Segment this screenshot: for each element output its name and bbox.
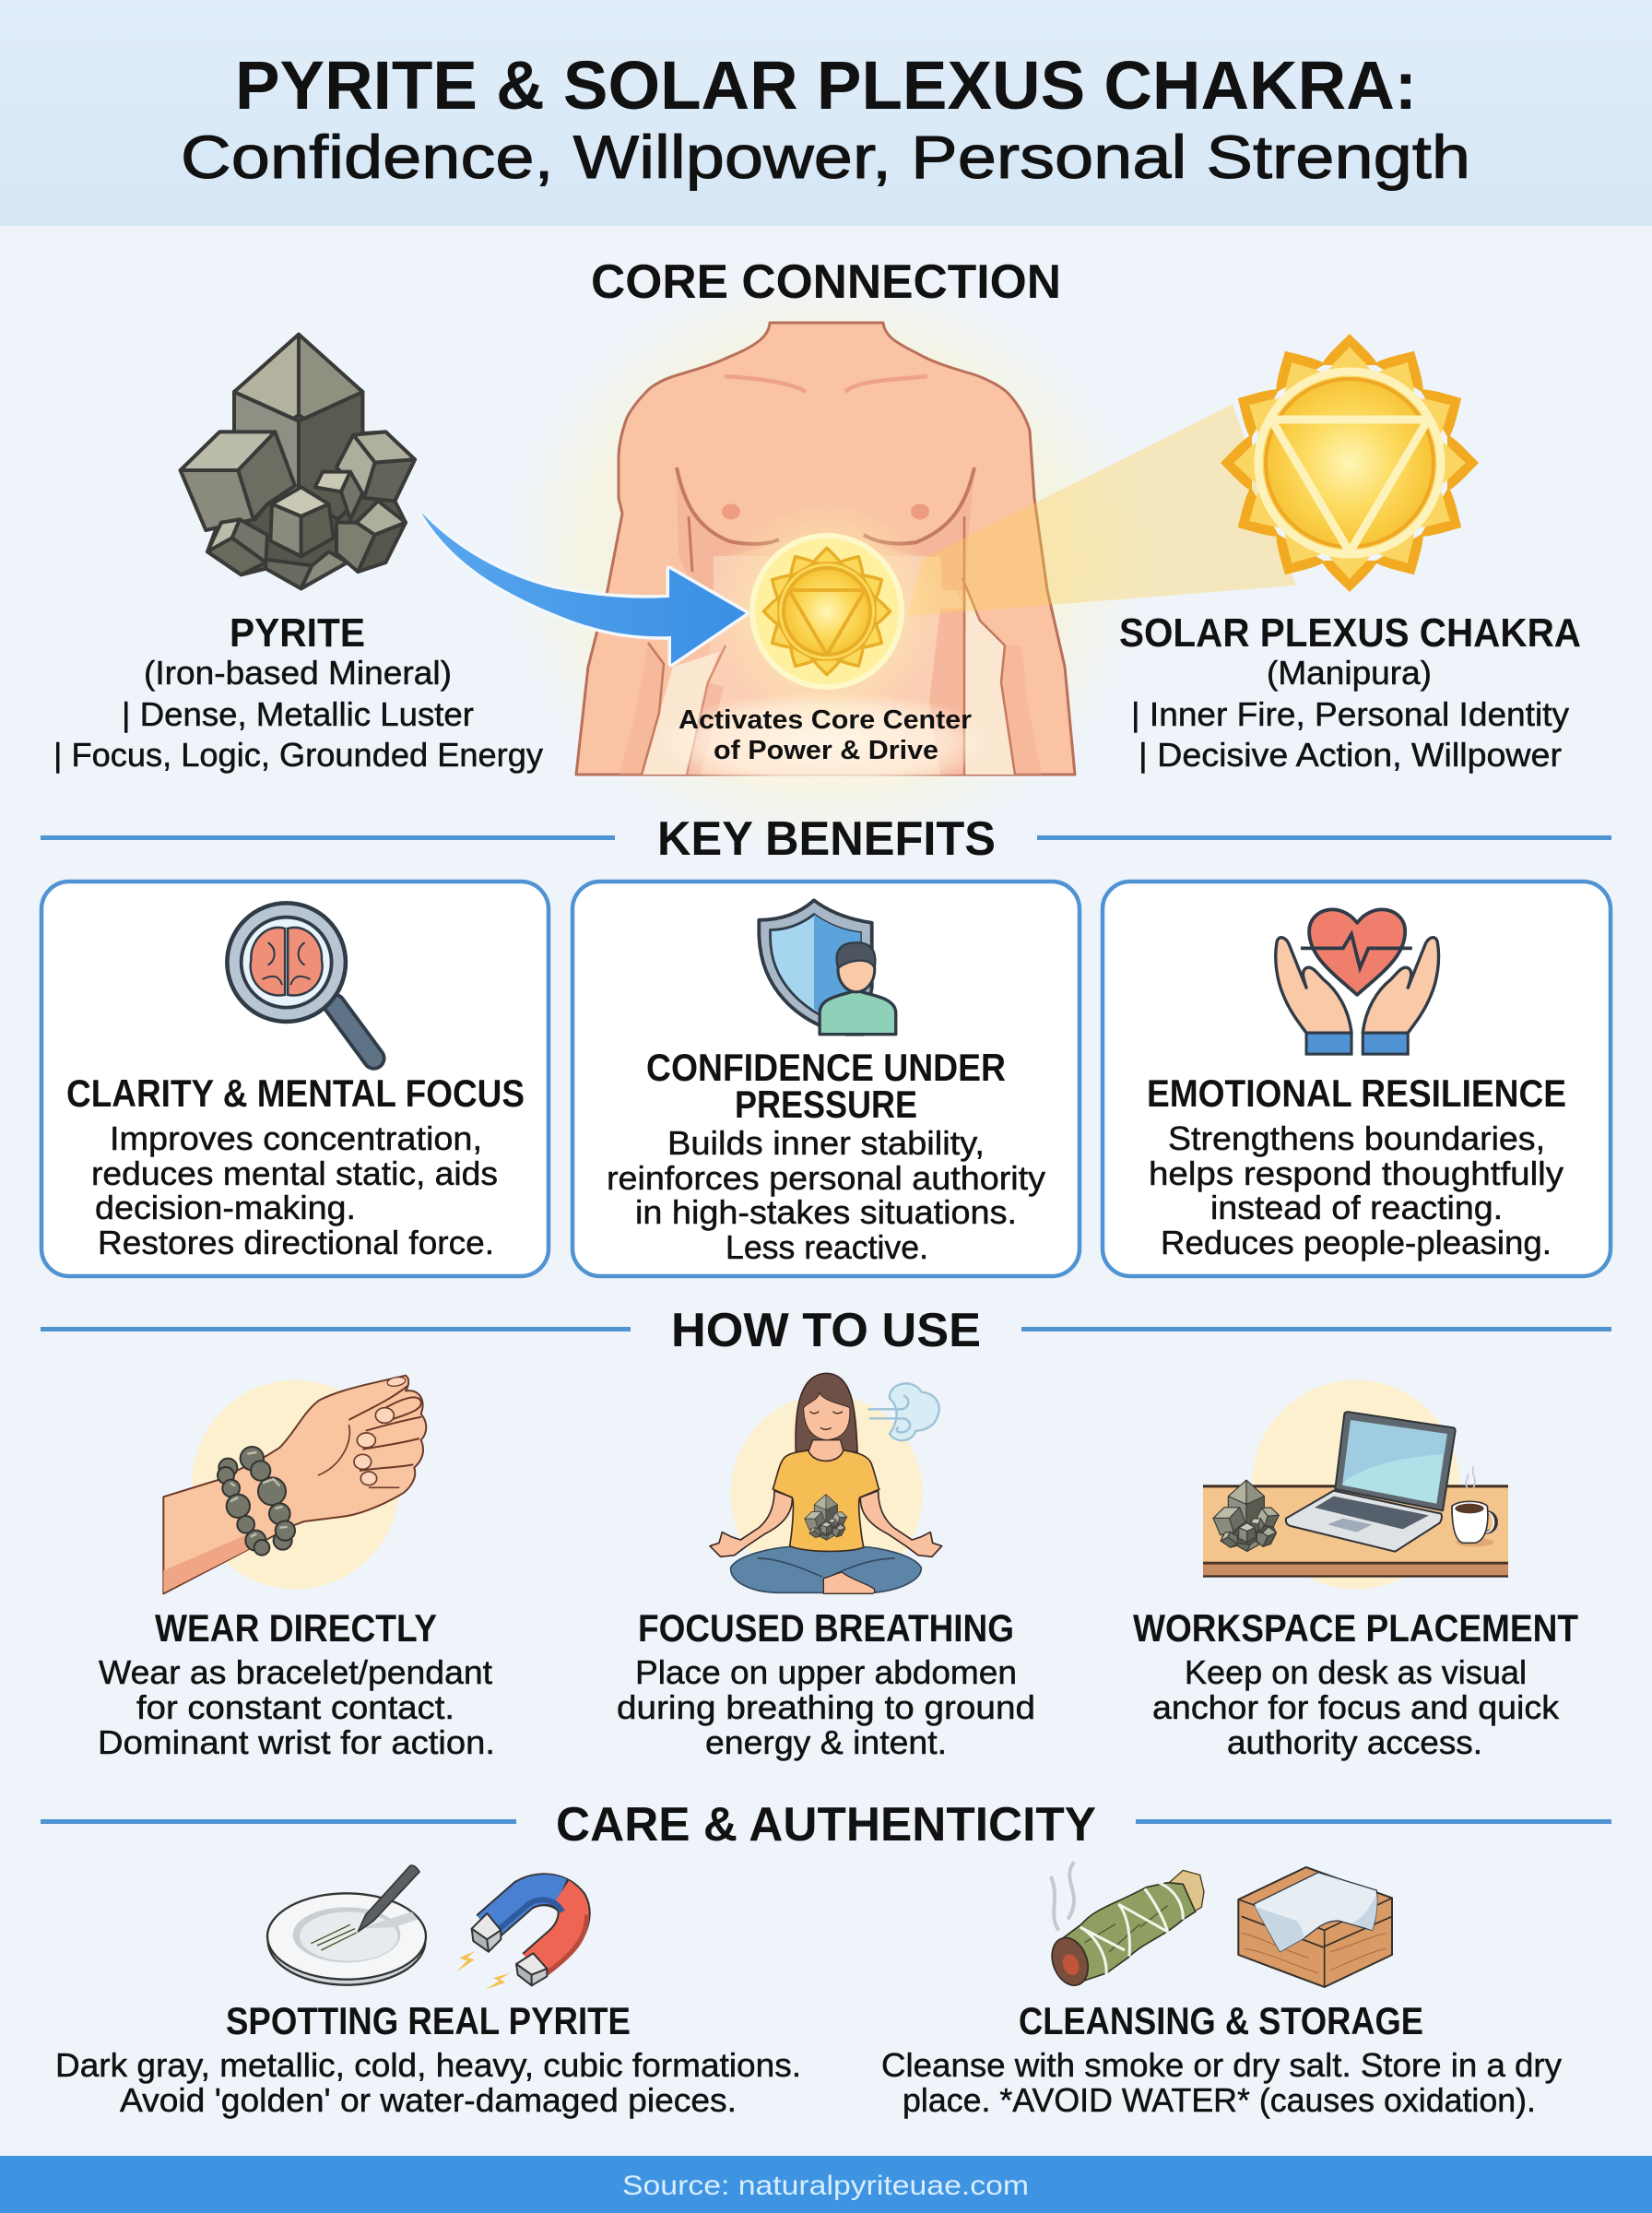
item body: Avoid 'golden' or water-damaged pieces. xyxy=(120,2081,737,2119)
heading: how to use xyxy=(41,1304,1611,1357)
item body: during breathing to ground xyxy=(617,1688,1035,1726)
item title: CLEANSING & STORAGE xyxy=(1019,1999,1423,2042)
card title: CONFIDENCE UNDER xyxy=(646,1046,1006,1089)
panel: core connection illustration xyxy=(181,267,1479,858)
item body xyxy=(98,1653,495,1761)
heading: key benefits xyxy=(41,812,1611,866)
item body xyxy=(55,2046,801,2119)
card body: Builds inner stability, xyxy=(667,1124,985,1162)
card body: Strengthens boundaries, xyxy=(1168,1119,1545,1157)
gap between arm and torso, right xyxy=(964,590,1015,775)
icon: magnifier with brain xyxy=(227,903,374,1059)
card body xyxy=(1149,1119,1564,1261)
item: spotting real pyrite xyxy=(55,1865,801,2119)
heading: how to use: HOW TO USE xyxy=(671,1304,981,1357)
item body: for constant contact. xyxy=(136,1688,454,1726)
text: pyrite: | Focus, Logic, Grounded Energy xyxy=(53,736,543,774)
heading: care and authenticity: CARE & AUTHENTICITY xyxy=(556,1798,1096,1852)
icon: hands holding heart xyxy=(1276,909,1439,1054)
item: focused breathing xyxy=(617,1373,1035,1761)
item body: place. *AVOID WATER* (causes oxidation). xyxy=(903,2081,1536,2119)
icon: large solar plexus chakra xyxy=(1221,334,1479,592)
card title xyxy=(646,1046,1006,1126)
gap between arm and torso, left xyxy=(642,652,719,775)
icon: meditating woman xyxy=(710,1373,942,1593)
beam from chakra xyxy=(908,404,1296,616)
item body xyxy=(617,1653,1035,1761)
item body: energy & intent. xyxy=(705,1723,947,1761)
body torso xyxy=(576,323,1075,793)
text: chakra xyxy=(1119,610,1581,774)
item body: authority access. xyxy=(1227,1723,1482,1761)
card body: Restores directional force. xyxy=(98,1224,494,1261)
panel: clarity and mental focus xyxy=(41,882,549,1276)
small chakra on abdomen xyxy=(712,496,942,727)
card body: Less reactive. xyxy=(726,1228,928,1266)
heading: care and authenticity xyxy=(41,1798,1611,1852)
item body: Keep on desk as visual xyxy=(1185,1653,1527,1691)
card title: EMOTIONAL RESILIENCE xyxy=(1147,1071,1566,1115)
item body: Cleanse with smoke or dry salt. Store in a dry xyxy=(881,2046,1562,2084)
icon: shield and person xyxy=(759,900,896,1035)
footer: Source: naturalpyriteuae.com xyxy=(622,2171,1029,2201)
icon: wrist with bracelet xyxy=(163,1376,426,1593)
card body: reduces mental static, aids xyxy=(91,1154,498,1192)
text: pyrite xyxy=(53,610,543,774)
item title: WEAR DIRECTLY xyxy=(155,1606,437,1650)
item title: WORKSPACE PLACEMENT xyxy=(1133,1606,1578,1650)
item title: FOCUSED BREATHING xyxy=(638,1606,1014,1650)
item body: Place on upper abdomen xyxy=(635,1653,1017,1691)
icon: desk with laptop and pyrite xyxy=(1203,1380,1508,1589)
card body: decision-making. xyxy=(95,1189,356,1226)
title: PYRITE & SOLAR PLEXUS CHAKRA: xyxy=(235,47,1417,124)
callout: activates core center: of Power & Drive xyxy=(714,736,938,765)
item: cleansing and storage xyxy=(881,1862,1562,2119)
card body: reinforces personal authority xyxy=(607,1159,1045,1197)
heading: core connection: CORE CONNECTION xyxy=(591,255,1061,309)
text: pyrite: | Dense, Metallic Luster xyxy=(122,695,474,733)
item: wear directly xyxy=(98,1376,495,1761)
item body: Dark gray, metallic, cold, heavy, cubic formations. xyxy=(55,2046,801,2084)
card body: Reduces people-pleasing. xyxy=(1161,1224,1552,1261)
glow behind torso xyxy=(503,267,1149,858)
callout: activates core center xyxy=(678,705,972,765)
item body: Dominant wrist for action. xyxy=(98,1723,495,1761)
text: chakra: | Decisive Action, Willpower xyxy=(1139,736,1562,774)
card body: helps respond thoughtfully xyxy=(1149,1154,1564,1192)
footer xyxy=(0,2156,1652,2213)
item body xyxy=(881,2046,1562,2119)
text: pyrite: (Iron-based Mineral) xyxy=(144,654,452,692)
card title: PRESSURE xyxy=(735,1083,917,1126)
subtitle: Confidence, Willpower, Personal Strength xyxy=(181,123,1470,191)
text: chakra: SOLAR PLEXUS CHAKRA xyxy=(1119,610,1581,656)
item body: anchor for focus and quick xyxy=(1152,1688,1560,1726)
arrow xyxy=(421,513,746,664)
text: chakra: | Inner Fire, Personal Identity xyxy=(1131,695,1569,733)
card body: Improves concentration, xyxy=(110,1119,482,1157)
header band xyxy=(0,0,1652,226)
icon: sage bundle and wooden box xyxy=(1045,1862,1392,1991)
text: chakra: (Manipura) xyxy=(1267,654,1432,692)
panel: confidence under pressure xyxy=(572,882,1080,1276)
icon: streak plate and magnet xyxy=(267,1865,587,1989)
heading: key benefits: KEY BENEFITS xyxy=(657,812,996,866)
text: pyrite: PYRITE xyxy=(230,610,365,656)
card body: in high-stakes situations. xyxy=(635,1193,1017,1231)
item body xyxy=(1152,1653,1560,1761)
item: workspace placement xyxy=(1133,1380,1578,1761)
card body: instead of reacting. xyxy=(1210,1189,1503,1226)
icon: pyrite crystal xyxy=(181,335,415,588)
item body: Wear as bracelet/pendant xyxy=(99,1653,492,1691)
card body xyxy=(91,1119,498,1261)
item title: SPOTTING REAL PYRITE xyxy=(226,1999,631,2042)
callout: activates core center: Activates Core Center xyxy=(678,705,972,735)
card title: CLARITY & MENTAL FOCUS xyxy=(66,1071,525,1115)
panel: emotional resilience xyxy=(1103,882,1611,1276)
card body xyxy=(607,1124,1045,1266)
